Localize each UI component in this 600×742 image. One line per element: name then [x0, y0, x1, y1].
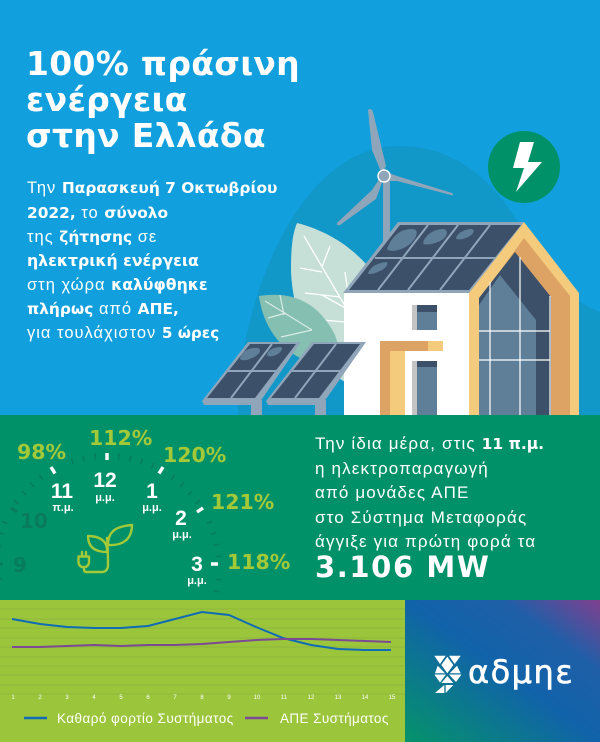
x axis labels: 10 — [254, 695, 261, 701]
panel: logo background — [405, 600, 600, 742]
hour labels: μ.μ. — [172, 529, 192, 541]
logo — [434, 653, 574, 693]
dim hours — [13, 509, 48, 577]
intro text: για τουλάχιστον 5 ώρες — [27, 324, 219, 342]
x axis labels: 4 — [92, 695, 96, 701]
wordmark: αδμηε — [468, 653, 574, 691]
house — [343, 222, 579, 415]
x axis labels: 9 — [227, 695, 231, 701]
title: 100% πράσινη — [26, 44, 300, 83]
roof solar panels — [343, 222, 524, 293]
chart legend: ΑΠΕ Συστήματος — [280, 711, 389, 726]
chart legend: Καθαρό φορτίο Συστήματος — [57, 711, 234, 726]
percent labels: 112% — [89, 426, 152, 450]
x axis labels: 15 — [389, 695, 396, 701]
text: same-day statement: Την ίδια μέρα, στις 11 π.μ. — [315, 434, 544, 453]
intro text: 2022, το σύνολο — [27, 204, 168, 222]
x axis labels: 3 — [65, 695, 69, 701]
x axis labels: 11 — [281, 695, 288, 701]
door and canopy — [380, 341, 443, 415]
small window — [412, 305, 437, 330]
percent labels — [17, 426, 290, 574]
gauge ticks — [0, 454, 221, 592]
intro text — [27, 179, 277, 342]
hour labels: π.μ. — [52, 502, 74, 514]
white house wall — [344, 293, 470, 415]
glass facade — [479, 252, 551, 415]
title: στην Ελλάδα — [26, 116, 266, 155]
x axis labels: 5 — [119, 695, 123, 701]
panel: green gauge band — [0, 415, 600, 600]
gauge hour marks — [51, 453, 218, 564]
intro text: της ζήτησης σε — [27, 228, 157, 246]
intro text: στη χώρα καλύφθηκε — [27, 275, 208, 294]
text: same-day statement: 3.106 MW — [315, 550, 490, 584]
icon: plug and sprout — [78, 525, 132, 572]
background hill — [238, 146, 600, 415]
gable frame — [469, 222, 579, 415]
hour labels: μ.μ. — [142, 502, 162, 514]
percent labels: 118% — [227, 550, 290, 574]
x axis labels: 12 — [308, 695, 315, 701]
x axis labels: 8 — [200, 695, 204, 701]
text: same-day statement: από μονάδες ΑΠΕ — [315, 483, 470, 502]
icon: small leaf — [259, 295, 345, 365]
percent labels: 98% — [17, 440, 66, 464]
series: net load — [12, 612, 391, 650]
icon: wind turbine — [337, 109, 453, 248]
text: same-day statement: άγγιξε για πρώτη φορά τα — [315, 532, 536, 551]
hour labels — [51, 469, 207, 587]
x axis labels: 2 — [38, 695, 42, 701]
line chart — [0, 609, 405, 701]
hour labels: μ.μ. — [187, 575, 207, 587]
panel: blue hero background — [0, 0, 600, 415]
hour labels: 12 — [93, 469, 117, 492]
gauge — [0, 426, 290, 592]
small solar panel right — [266, 342, 366, 415]
x axis labels — [11, 695, 396, 701]
text: same-day statement: στο Σύστημα Μεταφοράς — [315, 508, 527, 527]
hour labels: 11 — [51, 480, 73, 503]
text: same-day statement: η ηλεκτροπαραγωγή — [315, 459, 489, 478]
icon: logo mark — [434, 656, 462, 693]
dim hours: 10 — [20, 509, 48, 533]
intro text: ηλεκτρική ενέργεια — [27, 251, 199, 270]
intro text: πλήρως από ΑΠΕ, — [27, 300, 179, 318]
percent labels: 121% — [211, 490, 274, 514]
hour labels: 2 — [175, 507, 187, 530]
x axis labels: 7 — [173, 695, 177, 701]
series: renewables — [12, 639, 391, 647]
percent labels: 120% — [163, 443, 226, 467]
panel: lime chart background — [0, 600, 405, 742]
x axis labels: 14 — [362, 695, 369, 701]
text: same-day statement — [315, 434, 544, 584]
dim hours: 9 — [13, 553, 27, 577]
chart legend — [24, 711, 389, 726]
title: ενέργεια — [26, 80, 188, 119]
hour labels: 3 — [191, 553, 203, 576]
x axis labels: 13 — [335, 695, 342, 701]
icon: large leaf — [291, 223, 390, 382]
intro text: Την Παρασκευή 7 Οκτωβρίου — [27, 179, 277, 197]
title — [26, 44, 300, 155]
hour labels: μ.μ. — [95, 492, 115, 504]
small solar panel left — [202, 342, 301, 415]
x axis labels: 6 — [146, 695, 150, 701]
hour labels: 1 — [146, 480, 158, 503]
icon: lightning badge — [488, 131, 560, 203]
x axis labels: 1 — [11, 695, 15, 701]
